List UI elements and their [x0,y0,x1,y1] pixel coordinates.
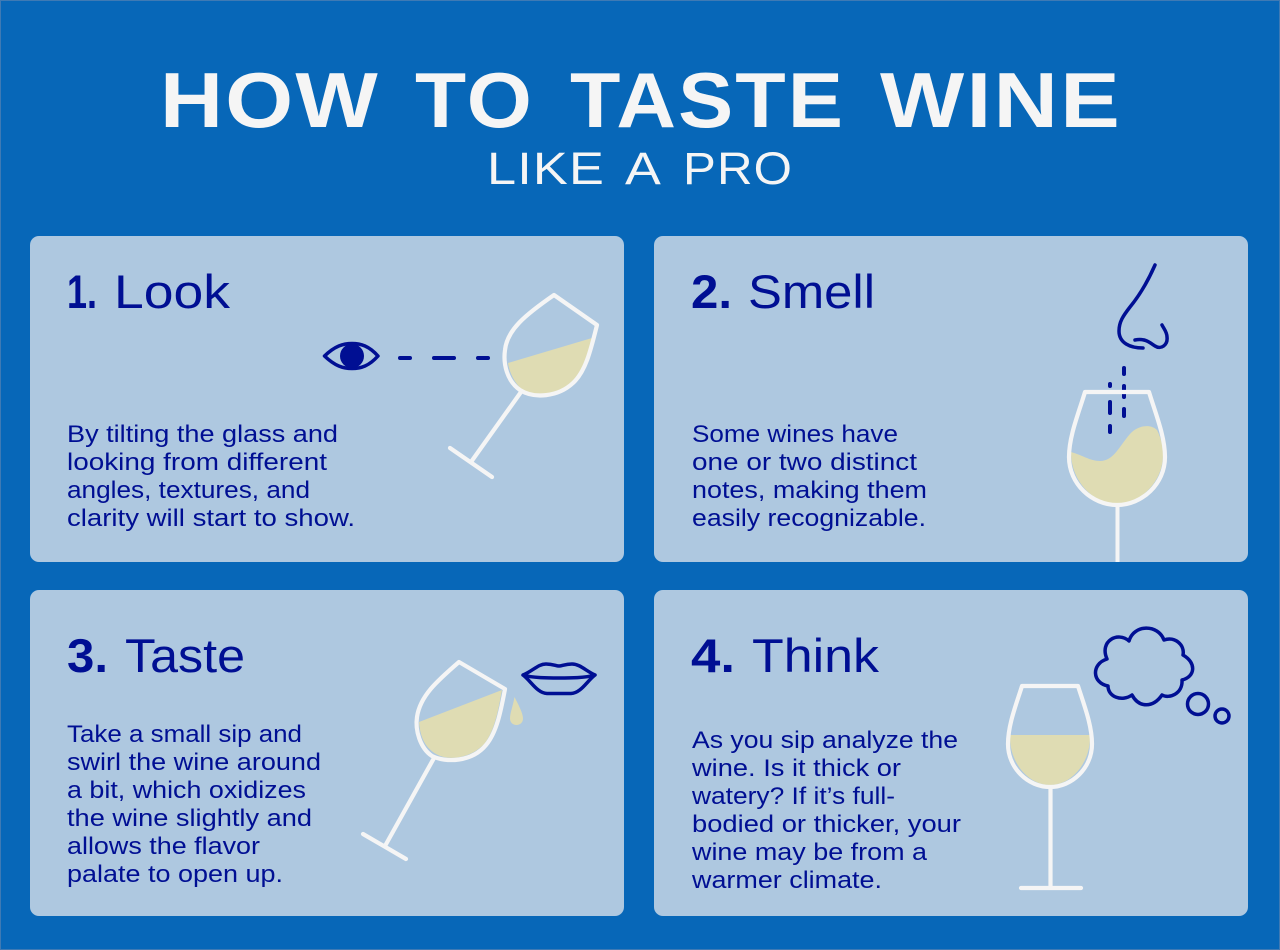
text block: smell description [692,421,927,532]
panel: 1. Look [30,236,624,562]
panel: 4. Think [654,590,1248,916]
text block: taste description: a bit, which oxidizes [67,777,306,804]
text block: smell description: notes, making them [692,477,927,504]
text block: smell description: one or two distinct [692,449,917,476]
heading: 3. Taste: Taste [125,630,245,683]
text block: think description: bodied or thicker, your [692,811,961,838]
icon: lips [523,664,595,694]
title: TASTE [570,56,845,144]
icon: thought cloud [1095,628,1229,723]
arrow: line of sight [400,356,488,360]
text block: look description: angles, textures, and [67,477,310,504]
icon: aroma dashes [1110,368,1124,432]
text block: look description [67,421,355,532]
icon: tilted wine glass [450,295,597,477]
text block: taste description: Take a small sip and [67,721,302,748]
panel: 3. Taste [30,590,624,916]
icon: wine drop [510,697,523,725]
text block: think description: wine. Is it thick or [691,755,901,782]
icon: wine glass [1008,686,1092,888]
icon: tilted wine glass pouring [363,662,505,859]
text block: taste description: the wine slightly and [67,805,312,832]
heading: 4. Think [691,630,879,683]
subtitle: LIKE [487,143,605,194]
heading: 3. Taste: 3. [67,630,108,683]
subtitle: PRO [683,143,793,194]
heading: 1. Look [67,266,230,319]
text block: taste description [67,721,321,888]
text block: smell description: easily recognizable. [692,505,926,532]
heading: 1. Look: Look [114,266,230,319]
title [160,56,1122,144]
text block: taste description: swirl the wine around [67,749,321,776]
text block: think description: watery? If it’s full- [691,783,895,810]
text block: look description: clarity will start to show. [67,505,355,532]
text block: smell description: Some wines have [692,421,898,448]
icon: wine glass with swirling wine [1069,392,1165,562]
heading: 1. Look: 1. [67,266,97,319]
icon: eye [324,344,378,368]
text block: think description: As you sip analyze the [692,727,958,754]
heading: 2. Smell [691,266,875,319]
text block: look description: By tilting the glass and [67,421,338,448]
icon: nose [1119,265,1167,348]
text block: think description: warmer climate. [691,867,882,894]
subtitle: A [625,143,662,194]
heading: 4. Think: Think [752,630,879,683]
heading: 3. Taste [67,630,245,683]
panel: 2. Smell [654,236,1248,562]
text block: think description [691,727,961,894]
title: WINE [880,56,1122,144]
text block: think description: wine may be from a [691,839,927,866]
text block: look description: looking from different [67,449,327,476]
title: TO [415,56,534,144]
subtitle [487,143,793,194]
text block: taste description: palate to open up. [67,861,283,888]
heading: 2. Smell: 2. [691,266,732,319]
heading: 4. Think: 4. [691,630,735,683]
text block: taste description: allows the flavor [67,833,260,860]
title: HOW [160,56,380,144]
heading: 2. Smell: Smell [748,266,875,319]
